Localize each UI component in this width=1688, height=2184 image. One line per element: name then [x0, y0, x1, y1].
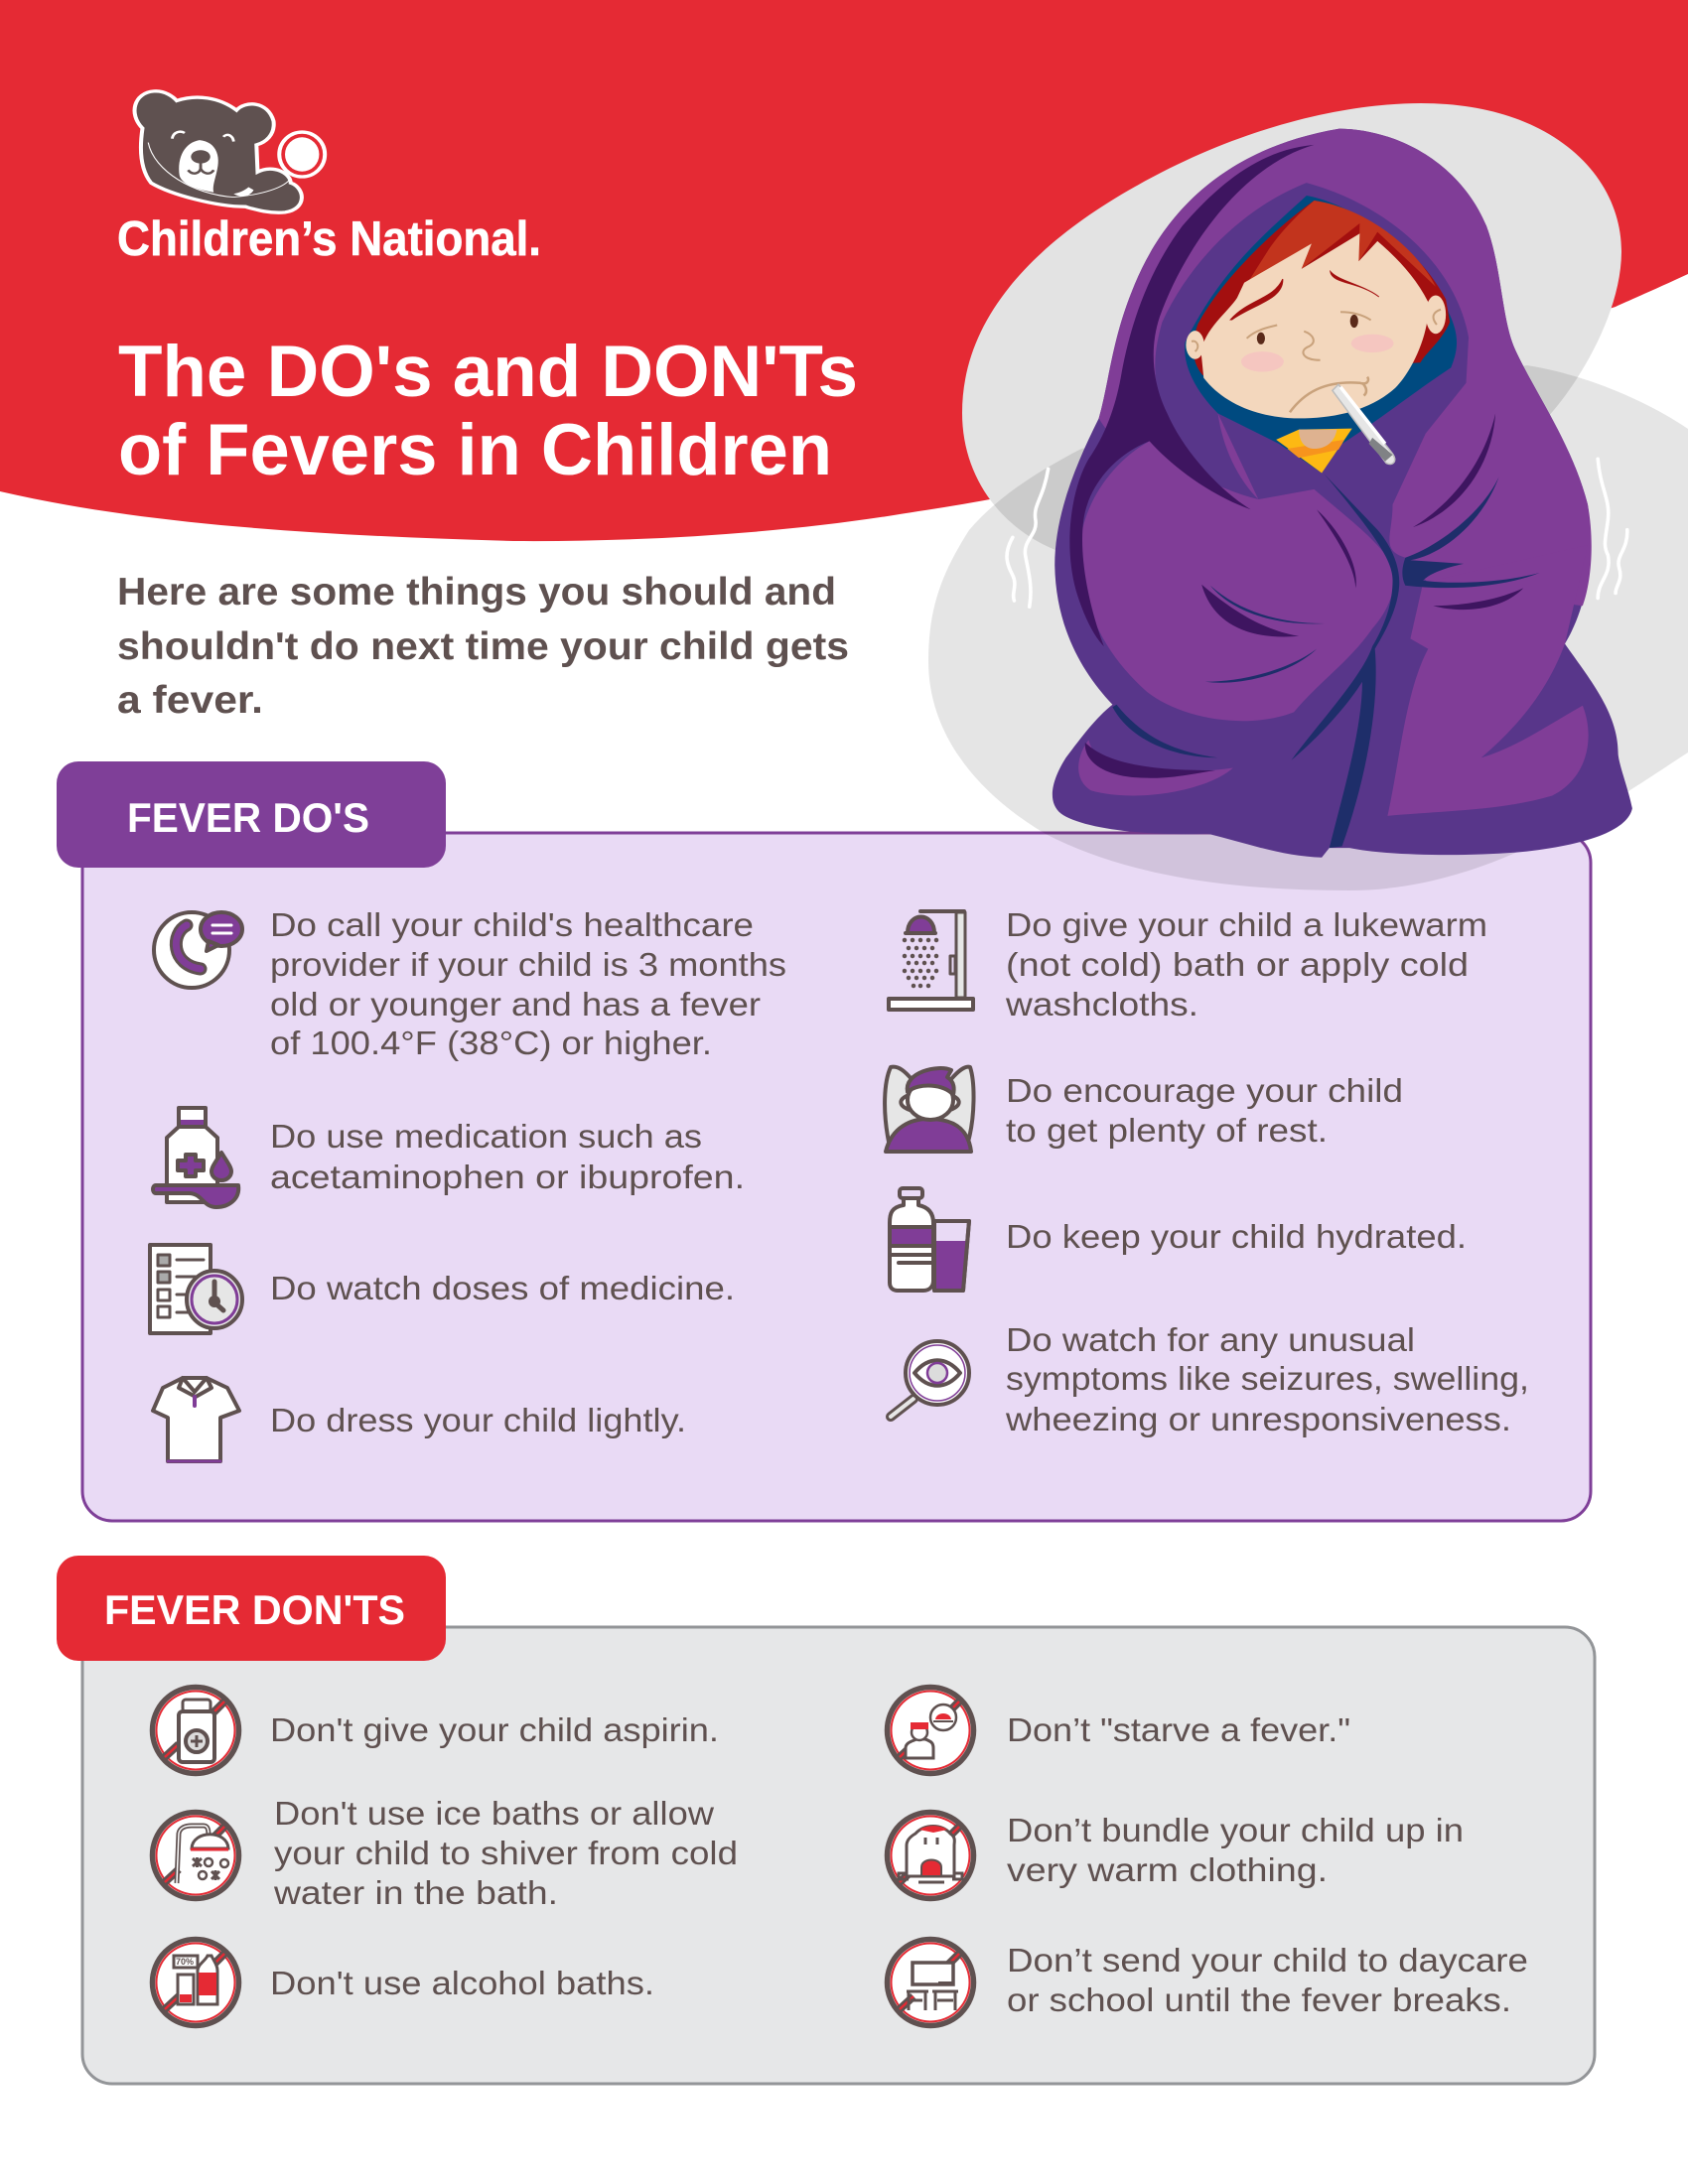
- icon: magnifier with eye: [891, 1341, 969, 1417]
- icon: bear with stethoscope: [135, 91, 325, 212]
- intro text: shouldn't do next time your child gets: [117, 625, 849, 668]
- icon: no school: [888, 1940, 973, 2025]
- illustration: child wrapped in purple blanket with thermometer: [1007, 129, 1632, 858]
- logo: children's national: Children’s National.: [117, 212, 541, 266]
- intro text: a fever.: [117, 679, 263, 722]
- item: don't bundle up: very warm clothing.: [1007, 1851, 1328, 1888]
- blanket: navy creases: [1112, 475, 1540, 848]
- intro text: [117, 571, 849, 722]
- shiver lines: [1007, 459, 1627, 607]
- item: no daycare: or school until the fever breaks.: [1007, 1981, 1511, 2018]
- thermometer: [1333, 384, 1395, 464]
- item: call healthcare provider: of 100.4°F (38°C) or higher.: [270, 1024, 712, 1061]
- item: lukewarm bath: washcloths.: [1005, 986, 1198, 1023]
- item: no ice baths: water in the bath.: [273, 1874, 558, 1911]
- item: unusual symptoms: symptoms like seizures, swelling,: [1006, 1360, 1529, 1397]
- icon: no warm jacket: [888, 1813, 973, 1898]
- blush: [1241, 351, 1284, 371]
- item: no aspirin: Don't give your child aspirin.: [270, 1711, 719, 1748]
- icon: no cold shower: [153, 1813, 238, 1898]
- title: of Fevers in Children: [118, 410, 832, 490]
- eyebrows: [1230, 271, 1379, 320]
- item: unusual symptoms: wheezing or unresponsiveness.: [1005, 1401, 1511, 1437]
- tab: fever don'ts heading: FEVER DON'TS: [104, 1586, 405, 1633]
- item: keep hydrated: Do keep your child hydrated.: [1006, 1218, 1467, 1255]
- item: unusual symptoms: [1005, 1321, 1529, 1437]
- item: call healthcare provider: [270, 906, 786, 1061]
- item: lukewarm bath: [1005, 906, 1487, 1023]
- item: don't bundle up: [1007, 1812, 1464, 1888]
- item: no alcohol baths: Don't use alcohol baths.: [270, 1965, 654, 2001]
- item: lukewarm bath: (not cold) bath or apply cold: [1006, 946, 1469, 983]
- item: call healthcare provider: provider if your child is 3 months: [270, 946, 786, 983]
- item: plenty of rest: to get plenty of rest.: [1006, 1112, 1328, 1149]
- item: use medication: acetaminophen or ibuprofen.: [270, 1159, 745, 1195]
- item: don't bundle up: Don’t bundle your child up in: [1007, 1812, 1464, 1848]
- icon: no alcohol bottles: [153, 1940, 238, 2025]
- item: watch doses: Do watch doses of medicine.: [270, 1270, 735, 1306]
- title: The DO's and DON'Ts: [118, 332, 858, 412]
- tab: fever don'ts heading: [57, 1556, 446, 1661]
- icon: checklist and clock: [150, 1245, 242, 1333]
- tab: fever do's heading: FEVER DO'S: [127, 794, 369, 841]
- neck and striped shirt: [1276, 429, 1352, 474]
- grey blob: lower backdrop: [928, 365, 1688, 890]
- icon: water bottle and glass: [890, 1188, 969, 1291]
- item: no daycare: [1007, 1942, 1528, 2018]
- icon: no alcohol bottles: 70%: [176, 1957, 194, 1967]
- icon: child resting on pillow: [885, 1067, 974, 1152]
- item: plenty of rest: [1006, 1072, 1403, 1149]
- ears: [1186, 331, 1204, 359]
- item: no ice baths: Don't use ice baths or allow: [274, 1795, 714, 1832]
- face: [1201, 233, 1429, 418]
- item: no ice baths: your child to shiver from cold: [274, 1835, 738, 1871]
- intro text: Here are some things you should and: [117, 571, 836, 614]
- tab: fever do's heading: [57, 761, 446, 868]
- icon: no starving: [888, 1688, 973, 1773]
- item: dress lightly: Do dress your child lightly.: [270, 1402, 686, 1438]
- icon: polo shirt: [153, 1378, 239, 1461]
- hair: [1194, 201, 1450, 375]
- blanket silhouette: [1053, 129, 1632, 858]
- item: use medication: [270, 1118, 745, 1195]
- blanket: dark left hood fold: [1069, 145, 1314, 646]
- item: no daycare: Don’t send your child to daycare: [1007, 1942, 1528, 1979]
- item: lukewarm bath: Do give your child a lukewarm: [1006, 906, 1487, 943]
- blanket: left arm light area: [1080, 413, 1394, 721]
- item: call healthcare provider: Do call your child's healthcare: [270, 906, 754, 943]
- item: plenty of rest: Do encourage your child: [1006, 1072, 1403, 1109]
- icon: phone with speech bubble: [154, 912, 242, 988]
- panel: fever do's: [57, 761, 1591, 1521]
- icon: shower: [889, 911, 973, 1010]
- blanket: fold shadows: [1085, 413, 1523, 778]
- item: unusual symptoms: Do watch for any unusual: [1006, 1321, 1415, 1358]
- item: don't starve a fever: Don’t "starve a fever.": [1007, 1711, 1350, 1748]
- eyes: [1257, 333, 1265, 344]
- blanket: lower left light area: [1078, 740, 1233, 795]
- item: use medication: Do use medication such as: [270, 1118, 702, 1155]
- icon: medicine bottle and spoon: [153, 1108, 238, 1207]
- blanket: right torso light area: [1387, 545, 1589, 816]
- blanket: hood light area: [1099, 129, 1592, 606]
- item: call healthcare provider: old or younger and has a fever: [270, 986, 761, 1023]
- logo: children's national: [117, 91, 541, 266]
- hood opening: [1185, 196, 1457, 474]
- nose and mouth: [1303, 332, 1321, 360]
- item: no ice baths: [273, 1795, 738, 1911]
- title: [118, 332, 858, 490]
- grey blob: head backdrop: [962, 103, 1621, 596]
- icon: no aspirin bottle: [153, 1688, 238, 1773]
- panel: fever don'ts: [57, 1556, 1595, 2084]
- red header background: [0, 0, 1688, 541]
